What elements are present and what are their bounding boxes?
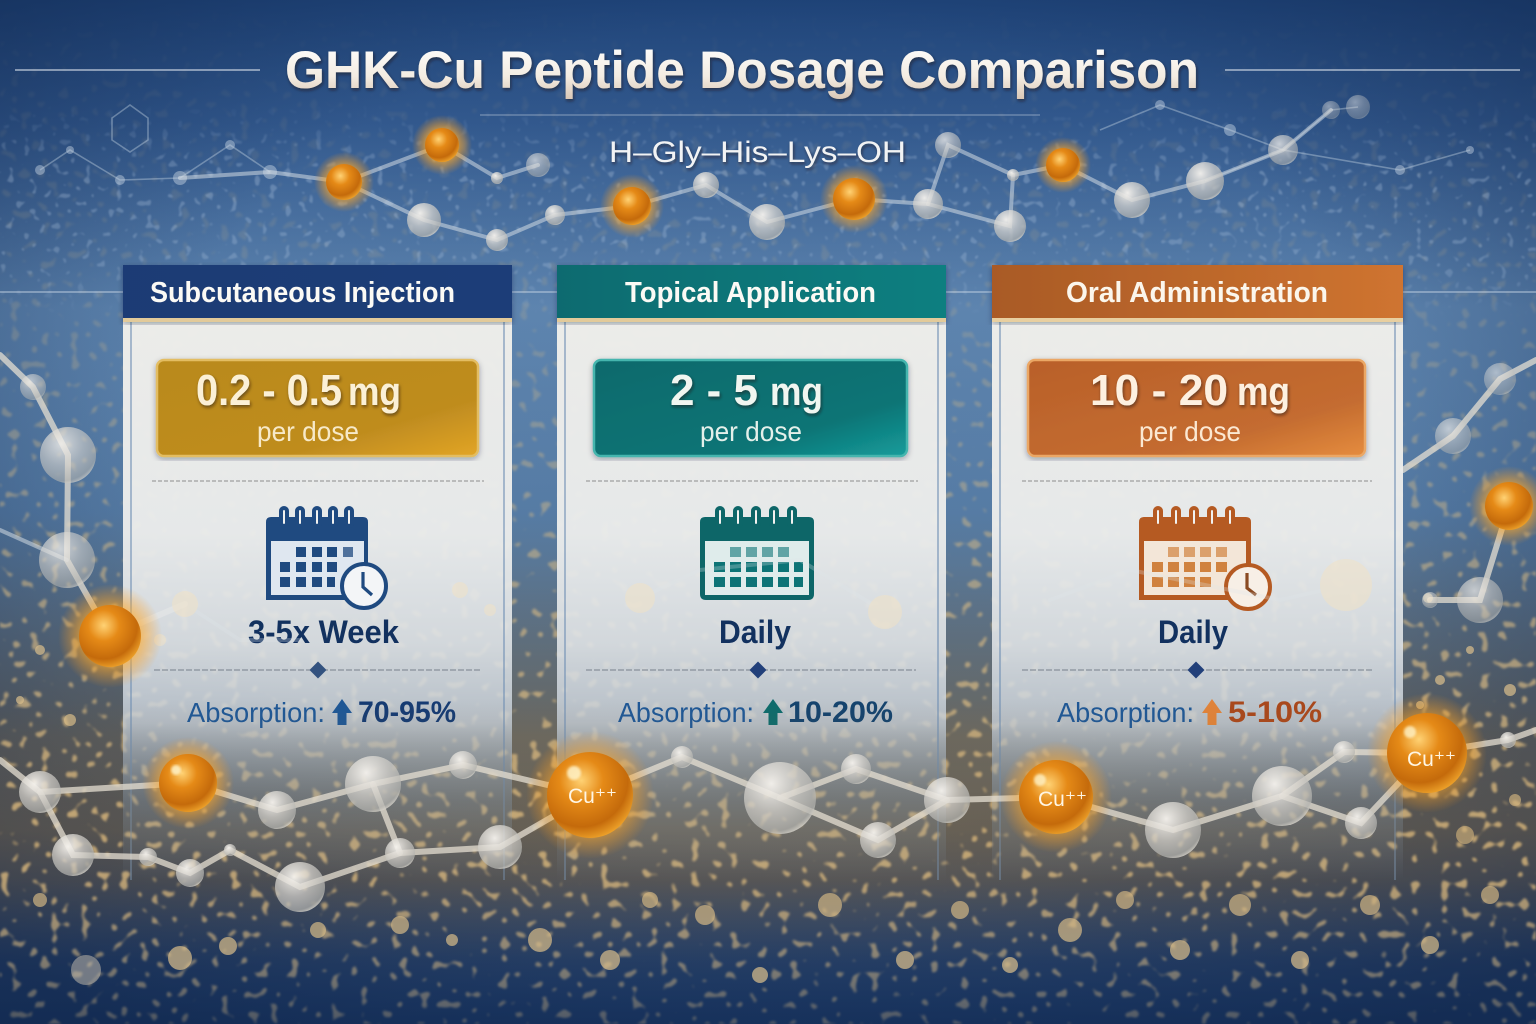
absorption: 70-95% (358, 696, 456, 729)
copper ion label: Cu⁺⁺ (568, 785, 617, 808)
faint molecule behind lower card content (154, 559, 1433, 646)
dosage badge: per dose (257, 416, 359, 447)
header: Oral Administration (1066, 277, 1328, 309)
frequency: 3-5x Week (248, 614, 399, 650)
icon: calendar (700, 508, 814, 600)
dosage badge: mg (348, 370, 401, 414)
header (992, 265, 1403, 322)
peptide formula: H–Gly–His–Lys–OH (609, 136, 906, 169)
dosage badge (1028, 360, 1365, 456)
dosage badge: 10 - 20 (1090, 366, 1228, 415)
title: GHK-Cu Peptide Dosage Comparison (285, 41, 1199, 100)
warm glow and speckles over the card bottoms (0, 724, 1536, 914)
copper ion label: Cu⁺⁺ (1038, 788, 1087, 811)
panel: topical application (557, 265, 946, 880)
absorption: 5-10% (1228, 696, 1322, 729)
copper ion label: Cu⁺⁺ (1407, 748, 1456, 771)
dosage badge: per dose (1139, 416, 1241, 447)
absorption: Absorption: (1057, 697, 1194, 728)
divider with diamond (154, 662, 482, 678)
absorption: Absorption: (187, 697, 325, 728)
molecule chain: upper (180, 95, 1370, 251)
decorative horizontal rule behind the cards (0, 291, 1536, 293)
dosage badge: 0.2 - 0.5 (196, 366, 342, 415)
side molecules (0, 355, 1536, 636)
panel: subcutaneous injection (123, 265, 512, 880)
header: Topical Application (625, 277, 876, 309)
card body (992, 320, 1403, 880)
dosage badge: per dose (700, 416, 802, 447)
header: Subcutaneous Injection (150, 277, 455, 309)
absorption (618, 696, 893, 729)
icon: calendar with clock (1139, 508, 1270, 609)
divider with diamond (1022, 662, 1372, 678)
faint molecular structure at top (35, 100, 1474, 185)
dosage badge: mg (1237, 370, 1290, 414)
divider with diamond (586, 662, 916, 678)
dosage badge (594, 360, 907, 456)
panel: oral administration (992, 265, 1403, 880)
absorption: Absorption: (618, 697, 754, 728)
molecule chain: lower with copper ions (0, 584, 1536, 912)
absorption (1057, 696, 1322, 729)
header (557, 265, 946, 322)
card body (557, 320, 946, 880)
absorption (187, 696, 456, 729)
dosage badge: mg (770, 370, 823, 414)
card body (123, 320, 512, 880)
header (123, 265, 512, 322)
dosage badge: 2 - 5 (670, 366, 758, 415)
icon: calendar with clock (266, 508, 386, 608)
frequency: Daily (1158, 614, 1228, 650)
dosage badge (157, 360, 478, 456)
frequency: Daily (719, 614, 791, 650)
absorption: 10-20% (788, 696, 893, 729)
